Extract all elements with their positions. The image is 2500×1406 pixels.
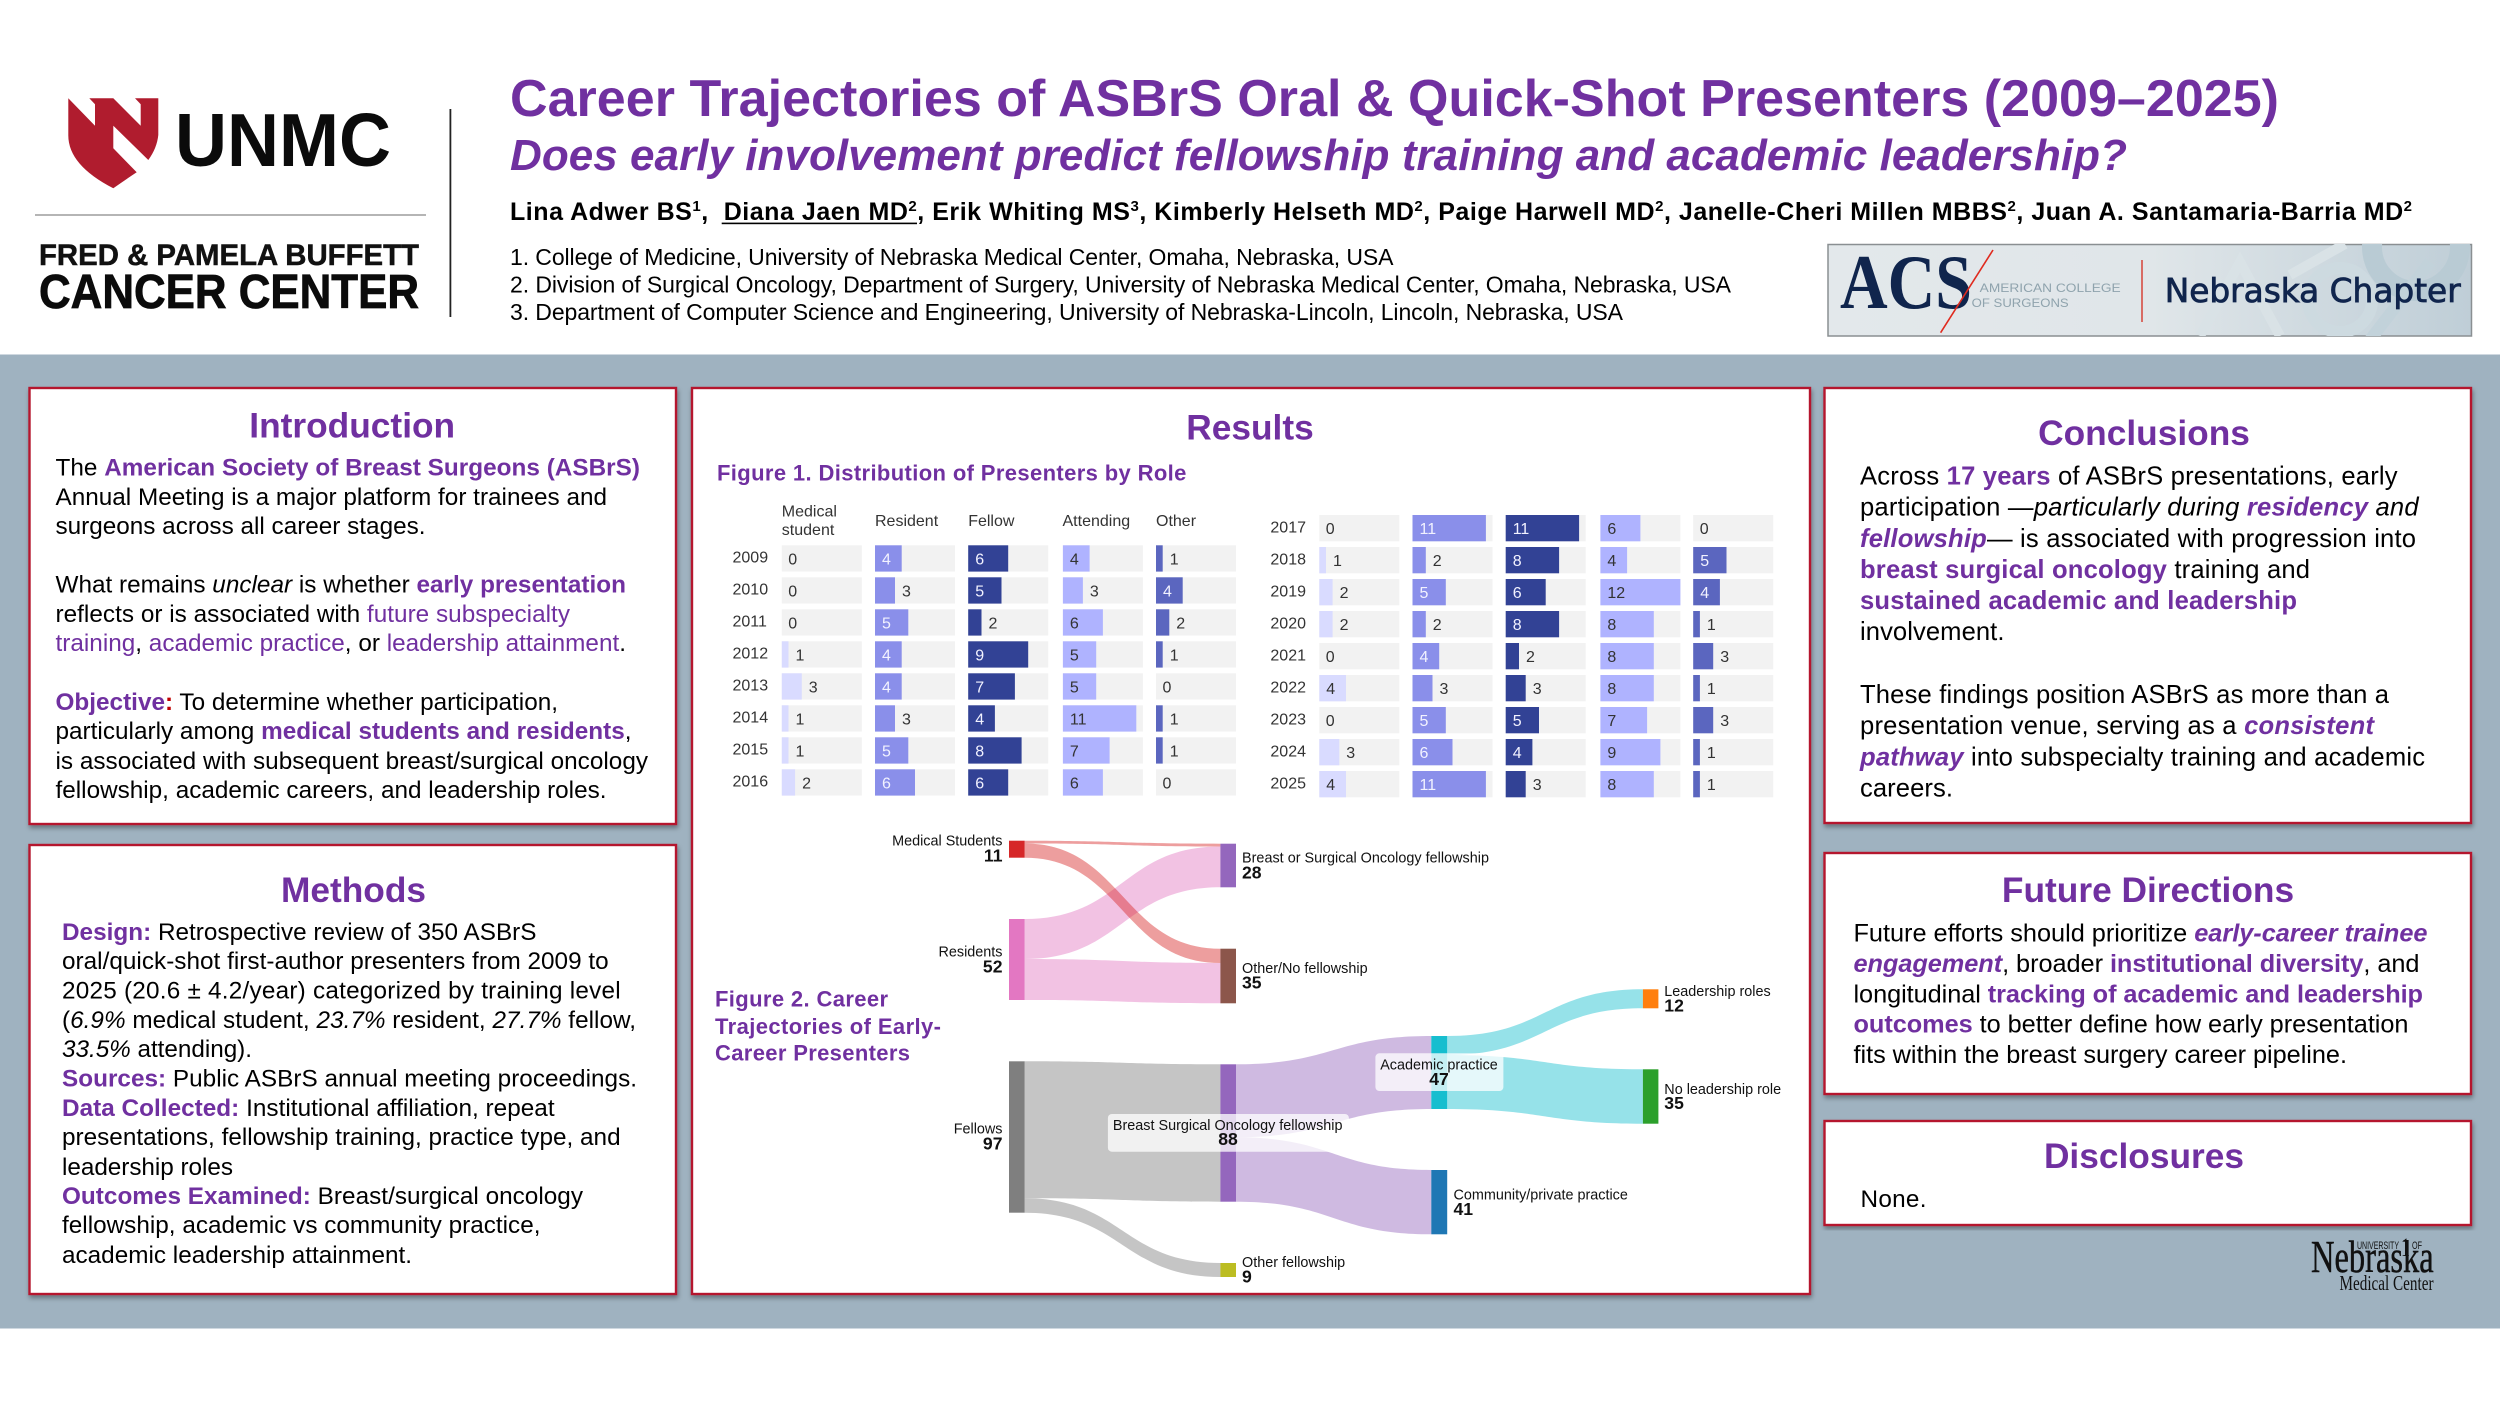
chart: heatmap 2017–2025: 2025 bbox=[1270, 776, 1306, 793]
text: introduction body bbox=[56, 455, 649, 804]
text: introduction body: surgeons across all career stages. bbox=[56, 513, 426, 540]
chart: heatmap 2009–2016: 4 bbox=[882, 679, 891, 696]
chart: heatmap 2009–2016: 7 bbox=[975, 679, 984, 696]
chart: heatmap 2009–2016: 3 bbox=[902, 583, 911, 600]
chart: heatmap 2009–2016: 2 bbox=[988, 615, 998, 632]
column headers: Other bbox=[1156, 513, 1197, 530]
chart: heatmap 2009–2016: 0 bbox=[788, 615, 797, 632]
chart: heatmap 2017–2025: 4 bbox=[1607, 553, 1616, 570]
authors: 2 bbox=[1655, 198, 1663, 215]
chart: heatmap 2017–2025: 3 bbox=[1440, 681, 1448, 698]
heading: disclosures: Disclosures bbox=[2044, 1137, 2244, 1176]
text: conclusions body: careers. bbox=[1860, 775, 1953, 803]
chart: heatmap 2017–2025: 8 bbox=[1607, 649, 1616, 666]
authors: , Kimberly Helseth MD bbox=[1139, 198, 1414, 226]
heading: methods: Methods bbox=[281, 871, 426, 910]
chart: heatmap 2009–2016: 0 bbox=[1162, 775, 1172, 792]
sankey labels: Academic practice bbox=[1380, 1057, 1498, 1073]
chart: heatmap 2009–2016: 6 bbox=[882, 775, 891, 792]
text: conclusions body: involvement. bbox=[1860, 618, 2004, 646]
text: introduction body: training, academic practice, or leadership attainment. bbox=[56, 630, 626, 657]
chart: heatmap 2017–2025: 2021 bbox=[1270, 648, 1306, 665]
figure 2 title bbox=[715, 987, 941, 1066]
chart: heatmap 2009–2016: 1 bbox=[1170, 743, 1179, 760]
subtitle: Does early involvement predict fellowship training and academic leadership? bbox=[510, 131, 2127, 180]
authors: Lina Adwer BS bbox=[510, 198, 692, 226]
Cancer Center: CANCER CENTER bbox=[39, 266, 419, 319]
chart: heatmap 2009–2016: 3 bbox=[1090, 583, 1099, 600]
chart: heatmap 2009–2016: 6 bbox=[1070, 775, 1079, 792]
authors: , Diana Jaen MD bbox=[701, 198, 908, 226]
text: methods body: 33.5% attending). bbox=[62, 1036, 252, 1063]
affiliations bbox=[510, 244, 1732, 325]
logo: UNMC and Buffett Cancer Center bbox=[35, 98, 426, 319]
authors: , Erik Whiting MS bbox=[917, 198, 1130, 226]
text: conclusions body bbox=[1859, 462, 2425, 803]
chart: heatmap 2009–2016: 0 bbox=[788, 551, 797, 568]
sankey labels: Other/No fellowship bbox=[1242, 961, 1368, 977]
text: methods body bbox=[62, 919, 637, 1269]
text: conclusions body: pathway into subspecialty training and academic bbox=[1859, 744, 2425, 772]
chart: heatmap 2009–2016 bbox=[732, 545, 1236, 796]
chart: heatmap 2017–2025: 1 bbox=[1333, 553, 1342, 570]
chart: heatmap 2017–2025: 8 bbox=[1607, 617, 1616, 634]
text: methods body: presentations, fellowship training, practice type, and bbox=[62, 1124, 621, 1151]
chart: heatmap 2017–2025: 6 bbox=[1513, 585, 1522, 602]
chart: heatmap 2017–2025: 2017 bbox=[1270, 520, 1306, 537]
panel: conclusions bbox=[1824, 388, 2471, 823]
chart: heatmap 2017–2025: 2023 bbox=[1270, 712, 1306, 729]
sankey labels: Medical Students bbox=[892, 834, 1002, 850]
text: methods body: leadership roles bbox=[62, 1154, 233, 1181]
chart: heatmap 2009–2016: 4 bbox=[1070, 551, 1079, 568]
sankey labels: 11 bbox=[984, 846, 1003, 866]
chart: heatmap 2009–2016: 4 bbox=[975, 711, 984, 728]
chart: heatmap 2017–2025: 11 bbox=[1420, 521, 1436, 538]
sankey labels: Breast or Surgical Oncology fellowship bbox=[1242, 851, 1489, 867]
chart: heatmap 2009–2016: 2016 bbox=[732, 774, 768, 791]
heading: conclusions: Conclusions bbox=[2038, 414, 2250, 453]
chart: heatmap 2009–2016: 2009 bbox=[732, 550, 768, 567]
chart: heatmap 2017–2025: 0 bbox=[1326, 713, 1335, 730]
text: conclusions body: fellowship— is associated with progression into bbox=[1860, 525, 2416, 553]
sankey labels: 9 bbox=[1242, 1267, 1252, 1287]
chart: heatmap 2017–2025: 3 bbox=[1533, 681, 1542, 698]
chart: heatmap 2009–2016: 5 bbox=[1070, 647, 1079, 664]
text: introduction body: The American Society of Breast Surgeons (ASBrS) bbox=[56, 455, 640, 482]
text: conclusions body: sustained academic and leadership bbox=[1860, 587, 2297, 615]
text: conclusions body: breast surgical oncology training and bbox=[1860, 556, 2310, 584]
chart: heatmap 2009–2016: 8 bbox=[975, 743, 984, 760]
column headers bbox=[782, 504, 1197, 539]
sankey labels: Residents bbox=[938, 945, 1002, 961]
sankey nodes bbox=[1009, 841, 1658, 1277]
text: introduction body: reflects or is associated with future subspecialty bbox=[56, 601, 571, 628]
text: introduction body: What remains unclear is whether early presentation bbox=[56, 572, 626, 599]
heading: results: Results bbox=[1186, 408, 1314, 448]
sankey labels: 35 bbox=[1242, 972, 1262, 992]
chart: heatmap 2017–2025: 4 bbox=[1700, 585, 1709, 602]
chart: heatmap 2009–2016: 3 bbox=[809, 679, 818, 696]
text: future directions body: longitudinal tracking of academic and leadership bbox=[1854, 980, 2423, 1008]
chart: heatmap 2009–2016: 2 bbox=[802, 775, 811, 792]
chart: heatmap 2009–2016: 0 bbox=[1162, 679, 1172, 696]
text: conclusions body: Across 17 years of ASBrS presentations, early bbox=[1860, 462, 2398, 490]
text: future directions body: fits within the breast surgery career pipeline. bbox=[1854, 1041, 2347, 1069]
chart: heatmap 2017–2025: 3 bbox=[1346, 745, 1355, 762]
text: future directions body bbox=[1854, 920, 2428, 1069]
logo: University of Nebraska Medical Center: OF bbox=[2412, 1240, 2422, 1252]
logo: ACS Nebraska Chapter banner bbox=[1827, 244, 2472, 337]
chart: heatmap 2017–2025: 9 bbox=[1607, 745, 1616, 762]
authors: , Janelle-Cheri Millen MBBS bbox=[1664, 198, 2007, 226]
authors: , Juan A. Santamaria-Barria MD bbox=[2016, 198, 2403, 226]
chart: heatmap 2017–2025: 2020 bbox=[1270, 616, 1306, 633]
column headers: Attending bbox=[1062, 513, 1130, 530]
panel: introduction bbox=[30, 388, 676, 824]
heading: future directions: Future Directions bbox=[2002, 871, 2294, 910]
chart: heatmap 2009–2016: 7 bbox=[1070, 743, 1079, 760]
sankey labels: Breast Surgical Oncology fellowship bbox=[1113, 1118, 1342, 1134]
text: future directions body: outcomes to better define how early presentation bbox=[1854, 1010, 2408, 1038]
title: Career Trajectories of ASBrS Oral & Quick-Shot Presenters (2009–2025) bbox=[510, 70, 2279, 128]
chart: heatmap 2009–2016: 2015 bbox=[732, 742, 768, 759]
chart: heatmap 2017–2025: 0 bbox=[1326, 521, 1335, 538]
background band bbox=[0, 354, 2500, 1328]
chart: heatmap 2017–2025: 2 bbox=[1340, 585, 1349, 602]
sankey labels: 97 bbox=[983, 1133, 1003, 1153]
chart: heatmap 2017–2025: 5 bbox=[1420, 585, 1428, 602]
chart: heatmap 2017–2025: 1 bbox=[1707, 681, 1716, 698]
sankey labels: Other fellowship bbox=[1242, 1255, 1345, 1271]
chart: heatmap 2017–2025: 2 bbox=[1526, 649, 1535, 666]
chart: heatmap 2017–2025: 11 bbox=[1420, 777, 1436, 794]
column headers: Resident bbox=[875, 513, 939, 530]
chart: heatmap 2017–2025: 5 bbox=[1700, 553, 1709, 570]
sankey labels: 88 bbox=[1218, 1129, 1238, 1149]
sankey labels: 52 bbox=[983, 956, 1003, 976]
chart: heatmap 2009–2016: 1 bbox=[1170, 647, 1179, 664]
chart: heatmap 2017–2025: 12 bbox=[1607, 585, 1625, 602]
chart: heatmap 2017–2025: 0 bbox=[1326, 649, 1335, 666]
ACS letters: ACS bbox=[1840, 239, 1972, 325]
chart: heatmap 2009–2016: 3 bbox=[902, 711, 911, 728]
chart: heatmap 2017–2025: 2 bbox=[1433, 553, 1442, 570]
sankey labels: No leadership role bbox=[1664, 1082, 1781, 1098]
text: future directions body: Future efforts should prioritize early-career trainee bbox=[1854, 920, 2428, 948]
chart: heatmap 2009–2016: 5 bbox=[882, 615, 891, 632]
chart: heatmap 2017–2025: 8 bbox=[1607, 681, 1616, 698]
logo: University of Nebraska Medical Center: Nebraska bbox=[2311, 1231, 2434, 1282]
sankey labels: 12 bbox=[1664, 996, 1684, 1016]
chart: heatmap 2017–2025: 2018 bbox=[1270, 552, 1306, 569]
chart: heatmap 2017–2025: 4 bbox=[1326, 777, 1335, 794]
chart: heatmap 2009–2016: 1 bbox=[1170, 551, 1179, 568]
text: introduction body: Objective: To determine whether participation, bbox=[56, 689, 558, 716]
chart: heatmap 2017–2025: 1 bbox=[1707, 745, 1716, 762]
chart: heatmap 2017–2025: 0 bbox=[1700, 521, 1709, 538]
chart: sankey career trajectories bbox=[892, 834, 1781, 1287]
chart: heatmap 2017–2025: 5 bbox=[1420, 713, 1428, 730]
text: methods body: Data Collected: Institutional affiliation, repeat bbox=[62, 1095, 555, 1122]
text: conclusions body: presentation venue, serving as a consistent bbox=[1860, 712, 2375, 740]
column headers: Medical bbox=[782, 504, 837, 521]
authors: 2 bbox=[2007, 198, 2016, 215]
text: disclosures body: None. bbox=[1860, 1186, 1926, 1213]
chart: heatmap 2017–2025: 4 bbox=[1326, 681, 1335, 698]
sankey labels: 35 bbox=[1664, 1093, 1684, 1113]
sankey label backgrounds bbox=[1108, 1053, 1503, 1152]
chart: heatmap 2009–2016: 6 bbox=[1070, 615, 1079, 632]
text: introduction body: is associated with subsequent breast/surgical oncology bbox=[56, 748, 649, 775]
sankey labels: Community/private practice bbox=[1454, 1187, 1628, 1203]
chart: heatmap 2009–2016: 4 bbox=[882, 551, 891, 568]
chart: heatmap 2009–2016: 2012 bbox=[732, 646, 768, 663]
icon: UNMC shield bbox=[68, 98, 158, 188]
text: methods body: oral/quick-shot first-author presenters from 2009 to bbox=[62, 948, 609, 975]
affiliations: 1. College of Medicine, University of Nebraska Medical Center, Omaha, Nebraska, USA bbox=[510, 244, 1394, 270]
authors: 2 bbox=[2404, 198, 2412, 215]
affiliations: 2. Division of Surgical Oncology, Department of Surgery, University of Nebraska Medical Center, Omaha, Nebraska, USA bbox=[510, 272, 1732, 298]
sankey labels bbox=[892, 834, 1781, 1287]
Nebraska Chapter: Nebraska Chapter bbox=[2165, 271, 2461, 310]
text: methods body: fellowship, academic vs community practice, bbox=[62, 1212, 540, 1239]
text: introduction body: particularly among medical students and residents, bbox=[56, 718, 632, 745]
panel: future directions bbox=[1824, 853, 2471, 1094]
chart: heatmap 2009–2016: 1 bbox=[796, 711, 804, 728]
American College of Surgeons bbox=[1972, 281, 2121, 310]
panel: results bbox=[692, 388, 1810, 1294]
logo: University of Nebraska Medical Center: UNIVERSITY bbox=[2357, 1240, 2399, 1252]
chart: heatmap 2017–2025: 11 bbox=[1513, 521, 1529, 538]
text: methods body: (6.9% medical student, 23.7% resident, 27.7% fellow, bbox=[62, 1007, 636, 1034]
figure 1 title: Figure 1. Distribution of Presenters by Role bbox=[717, 461, 1186, 486]
text: future directions body: engagement, broader institutional diversity, and bbox=[1854, 950, 2420, 978]
chart: heatmap 2009–2016: 6 bbox=[975, 551, 984, 568]
chart: heatmap 2017–2025: 2019 bbox=[1270, 584, 1306, 601]
chart: heatmap 2017–2025: 8 bbox=[1513, 617, 1522, 634]
chart: heatmap 2009–2016: 5 bbox=[1070, 679, 1079, 696]
affiliations: 3. Department of Computer Science and Engineering, University of Nebraska-Lincoln, Lincoln, Nebraska, USA bbox=[510, 299, 1624, 325]
heading: introduction: Introduction bbox=[249, 407, 455, 446]
chart: heatmap 2017–2025: 8 bbox=[1513, 553, 1522, 570]
chart: heatmap 2017–2025: 7 bbox=[1607, 713, 1616, 730]
chart: heatmap 2009–2016: 4 bbox=[882, 647, 891, 664]
text: introduction body: Annual Meeting is a major platform for trainees and bbox=[56, 484, 607, 511]
chart: heatmap 2017–2025: 3 bbox=[1720, 713, 1729, 730]
chart: heatmap 2009–2016: 4 bbox=[1163, 583, 1172, 600]
sankey labels: Leadership roles bbox=[1664, 984, 1771, 1000]
authors bbox=[510, 198, 2412, 226]
panel: methods bbox=[30, 845, 676, 1294]
chart: heatmap 2017–2025: 2022 bbox=[1270, 680, 1306, 697]
chart: heatmap 2017–2025: 4 bbox=[1513, 745, 1522, 762]
chart: heatmap 2009–2016: 1 bbox=[1170, 711, 1179, 728]
chart: heatmap 2009–2016: 2011 bbox=[732, 614, 767, 631]
sankey links bbox=[1025, 841, 1643, 1277]
chart: heatmap 2009–2016: 1 bbox=[796, 743, 804, 760]
text: methods body: Sources: Public ASBrS annual meeting proceedings. bbox=[62, 1066, 637, 1093]
chart: heatmap 2017–2025: 1 bbox=[1707, 777, 1716, 794]
chart: heatmap 2009–2016: 5 bbox=[975, 583, 984, 600]
chart: heatmap 2017–2025: 5 bbox=[1513, 713, 1522, 730]
chart: heatmap 2009–2016: 11 bbox=[1070, 711, 1087, 728]
chart: heatmap 2017–2025: 4 bbox=[1420, 649, 1428, 666]
American College of Surgeons: OF SURGEONS bbox=[1972, 296, 2069, 310]
UNMC wordmark: UNMC bbox=[175, 98, 391, 182]
logo: University of Nebraska Medical Center: Medical Center bbox=[2340, 1271, 2434, 1295]
figure 2 title: Career Presenters bbox=[715, 1041, 910, 1066]
text: methods body: Outcomes Examined: Breast/surgical oncology bbox=[62, 1183, 584, 1210]
chart: heatmap 2009–2016: 1 bbox=[796, 647, 804, 664]
sankey labels: 47 bbox=[1429, 1069, 1449, 1089]
chart: heatmap 2009–2016: 2014 bbox=[732, 710, 768, 727]
chart: heatmap 2017–2025: 3 bbox=[1533, 777, 1542, 794]
panel: disclosures bbox=[1824, 1121, 2471, 1225]
chart: heatmap 2017–2025: 2024 bbox=[1270, 744, 1306, 761]
chart: heatmap 2009–2016: 2 bbox=[1176, 615, 1185, 632]
chart: heatmap 2017–2025: 2 bbox=[1340, 617, 1349, 634]
text: introduction body: fellowship, academic careers, and leadership roles. bbox=[56, 777, 606, 804]
chart: heatmap 2017–2025: 8 bbox=[1607, 777, 1616, 794]
column headers: student bbox=[782, 522, 835, 539]
chart: heatmap 2009–2016: 9 bbox=[975, 647, 984, 664]
text: methods body: academic leadership attainment. bbox=[62, 1242, 412, 1269]
authors: 1 bbox=[692, 198, 701, 215]
text: methods body: 2025 (20.6 ± 4.2/year) categorized by training level bbox=[62, 978, 621, 1005]
chart: heatmap 2017–2025: 6 bbox=[1420, 745, 1428, 762]
chart: heatmap 2017–2025: 2 bbox=[1433, 617, 1442, 634]
chart: heatmap 2009–2016: 2010 bbox=[732, 582, 768, 599]
chart: heatmap 2009–2016: 2013 bbox=[732, 678, 768, 695]
American College of Surgeons: AMERICAN COLLEGE bbox=[1980, 281, 2121, 295]
figure 2 title: Trajectories of Early- bbox=[715, 1014, 941, 1039]
chart: heatmap 2017–2025: 3 bbox=[1720, 649, 1729, 666]
chart: heatmap 2009–2016: 0 bbox=[788, 583, 797, 600]
text: conclusions body: These findings position ASBrS as more than a bbox=[1860, 681, 2390, 709]
authors: 2 bbox=[1414, 198, 1423, 215]
chart: heatmap 2017–2025: 1 bbox=[1707, 617, 1716, 634]
sankey labels: 28 bbox=[1242, 862, 1262, 882]
chart: heatmap 2017–2025 bbox=[1270, 515, 1773, 797]
chart: heatmap 2009–2016: 6 bbox=[975, 775, 984, 792]
logo: University of Nebraska Medical Center: 1 bbox=[2401, 1233, 2410, 1262]
authors: 3 bbox=[1130, 198, 1139, 215]
text: methods body: Design: Retrospective review of 350 ASBrS bbox=[62, 919, 536, 946]
chart: heatmap 2009–2016: 5 bbox=[882, 743, 891, 760]
logo: University of Nebraska Medical Center bbox=[2311, 1231, 2434, 1295]
authors: 2 bbox=[908, 198, 917, 215]
sankey labels: 41 bbox=[1454, 1199, 1473, 1219]
chart: heatmap 2017–2025: 6 bbox=[1607, 521, 1616, 538]
Fred & Pamela Buffett: FRED & PAMELA BUFFETT bbox=[39, 239, 419, 272]
authors: , Paige Harwell MD bbox=[1423, 198, 1655, 226]
text: conclusions body: participation —particularly during residency and bbox=[1860, 494, 2419, 522]
figure 2 title: Figure 2. Career bbox=[715, 987, 888, 1012]
column headers: Fellow bbox=[968, 513, 1015, 530]
sankey labels: Fellows bbox=[954, 1122, 1002, 1138]
